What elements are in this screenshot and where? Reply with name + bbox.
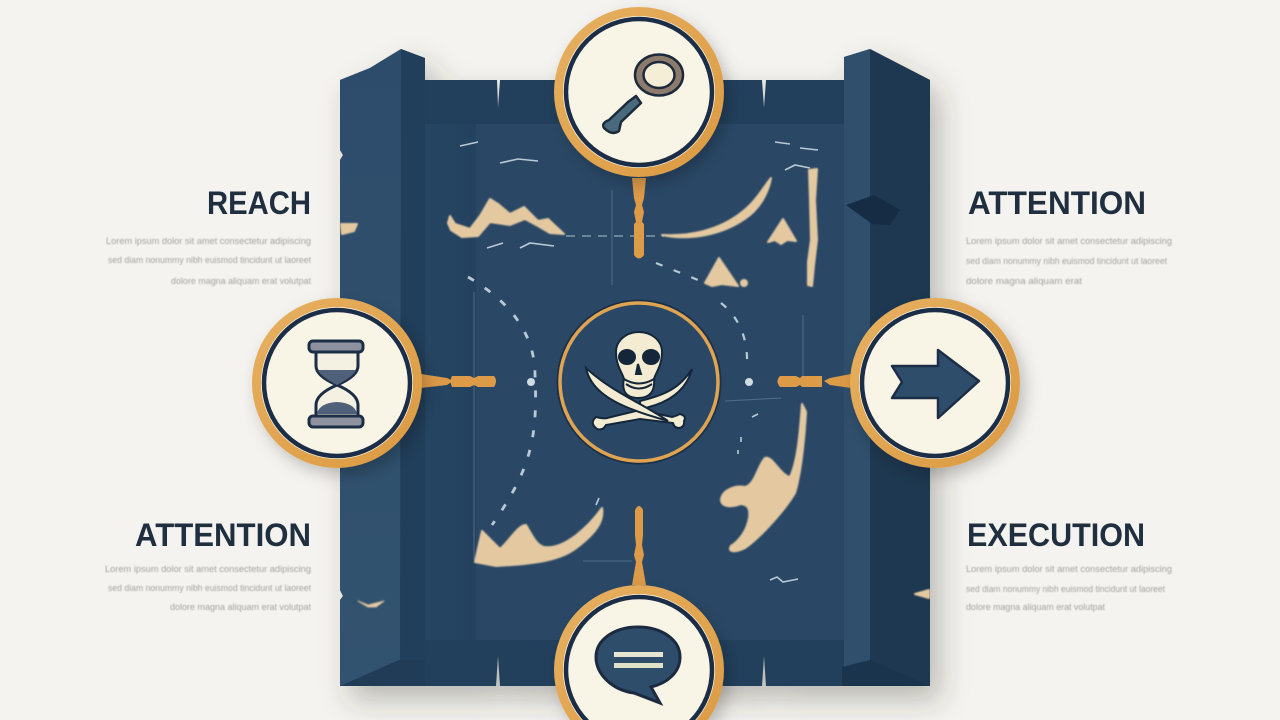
text block: reach: sed diam nonummy nibh euismod tincidunt ut laoreet — [108, 255, 311, 266]
text block: reach — [106, 236, 311, 287]
text block: reach: dolore magna aliquam erat volutpat — [171, 276, 311, 287]
route waypoints — [527, 378, 753, 386]
connector: right — [778, 374, 851, 388]
small map marks — [460, 142, 818, 582]
heading: attention left: ATTENTION — [135, 517, 311, 553]
text block: attention left: Lorem ipsum dolor sit amet consectetur adipiscing — [105, 564, 311, 575]
text block: execution — [966, 564, 1172, 613]
central emblem — [559, 302, 719, 462]
dashed route right — [656, 263, 747, 365]
dashed route left — [468, 277, 536, 525]
grid lines — [474, 190, 803, 561]
text block: attention right: dolore magna aliquam erat — [966, 276, 1082, 287]
connector: top — [632, 178, 646, 258]
icon circle: speech bubble — [558, 590, 720, 720]
text block: attention right: Lorem ipsum dolor sit amet consectetur adipiscing — [966, 236, 1172, 247]
text block: attention left — [105, 564, 311, 613]
text block: execution: dolore magna aliquam erat volutpat — [966, 602, 1105, 613]
panel: treasure map — [340, 49, 930, 686]
icon: hourglass — [309, 341, 363, 427]
heading: reach: REACH — [207, 185, 311, 221]
text block: attention right — [966, 236, 1172, 287]
crossed swords and bones — [586, 368, 692, 430]
land shapes — [341, 169, 929, 607]
icon: magnifying glass — [603, 54, 683, 133]
text block: execution: sed diam nonummy nibh euismod tincidunt ut laoreet — [966, 584, 1165, 595]
text block: attention left: sed diam nonummy nibh euismod tincidunt ut laoreet — [108, 583, 311, 594]
heading: attention right: ATTENTION — [968, 185, 1146, 221]
text block: attention right: sed diam nonummy nibh euismod tincidunt ut laoreet — [966, 256, 1167, 267]
text block: attention left: dolore magna aliquam erat volutpat — [170, 602, 311, 613]
heading: execution: EXECUTION — [967, 517, 1145, 553]
text block: execution: Lorem ipsum dolor sit amet consectetur adipiscing — [966, 564, 1172, 575]
icon circle: arrow — [854, 302, 1016, 464]
icon circle: hourglass — [256, 302, 418, 464]
text block: reach: Lorem ipsum dolor sit amet consectetur adipiscing — [106, 236, 311, 247]
emblem ring — [559, 302, 719, 462]
connector: left — [421, 374, 496, 388]
map body — [340, 49, 930, 686]
connector: bottom — [632, 506, 646, 585]
left scroll strip — [340, 49, 425, 686]
icon circle: magnifying glass — [558, 12, 720, 172]
icon: arrow — [892, 350, 979, 418]
map centre field — [425, 124, 845, 640]
icon: speech bubble — [596, 627, 680, 703]
skull — [616, 332, 662, 398]
right scroll strip — [842, 49, 930, 686]
